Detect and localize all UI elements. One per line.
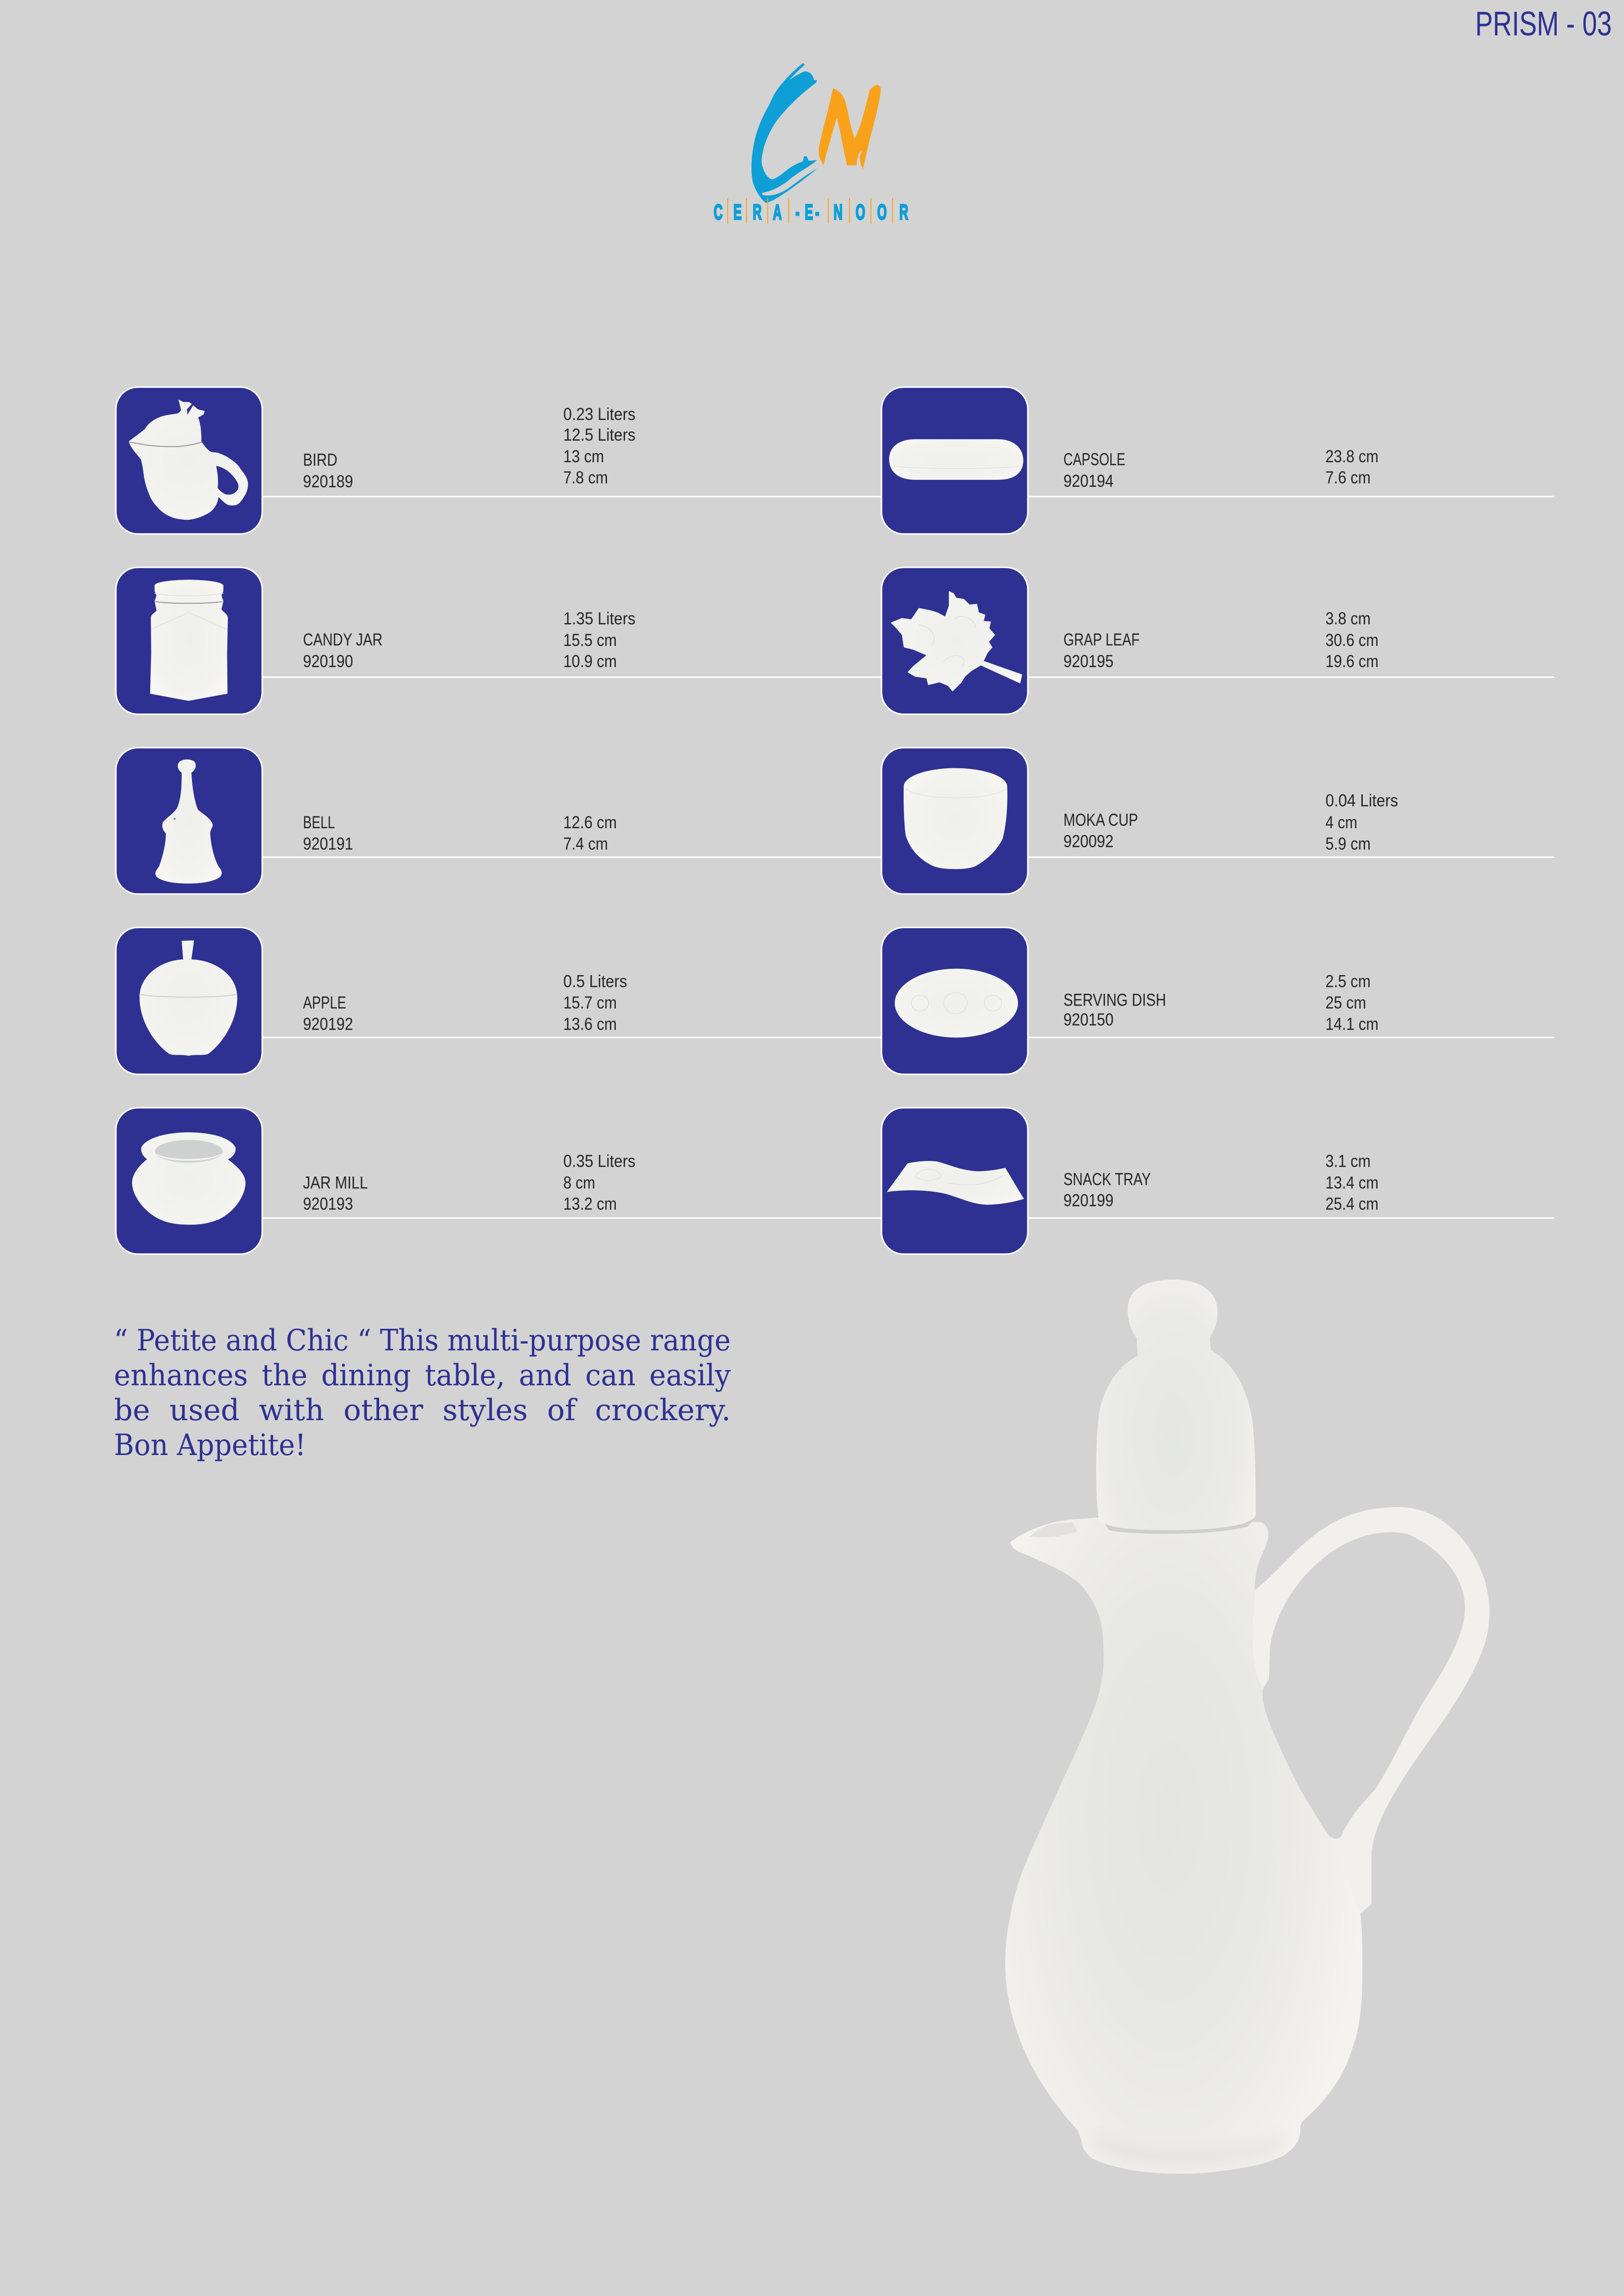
product name and code <box>1064 811 1138 851</box>
dimensions <box>1325 1151 1378 1213</box>
dimensions: 13 cm <box>563 447 604 466</box>
dimensions: 0.5 Liters <box>563 972 627 991</box>
dimensions: 7.8 cm <box>563 468 608 487</box>
dimensions: 3.1 cm <box>1325 1151 1371 1171</box>
product name and code <box>303 993 353 1034</box>
hero image: oil jug with stopper <box>1005 1280 1489 2174</box>
product: Serving Dish <box>881 927 1378 1074</box>
product: Bird <box>116 387 635 534</box>
dimensions: 19.6 cm <box>1325 652 1378 671</box>
description text: “ Petite and Chic “ This multi-purpose range <box>114 1323 731 1358</box>
product name and code: MOKA CUP <box>1064 811 1138 830</box>
dimensions: 13.6 cm <box>563 1015 617 1034</box>
dimensions: 0.23 Liters <box>563 405 635 424</box>
product name and code: 920190 <box>303 652 353 671</box>
product name and code <box>1064 990 1166 1030</box>
tile <box>881 927 1028 1074</box>
tile <box>881 748 1028 894</box>
product name and code: 920192 <box>303 1015 353 1034</box>
icon: grape leaf dish <box>891 591 1022 691</box>
dimensions: 5.9 cm <box>1325 834 1371 854</box>
product name and code: 920195 <box>1064 652 1114 671</box>
product name and code: CAPSOLE <box>1064 450 1126 469</box>
product: Jar Mill <box>116 1108 635 1254</box>
dimensions: 12.6 cm <box>563 813 617 832</box>
product name and code <box>1064 1170 1151 1210</box>
icon: moka cup <box>904 768 1007 869</box>
dimensions: 1.35 Liters <box>563 609 635 628</box>
icon: jar mill <box>132 1132 246 1225</box>
logo divider bars <box>727 198 893 224</box>
product name and code: BIRD <box>303 450 337 470</box>
product name and code: 920194 <box>1064 472 1114 491</box>
product name and code <box>303 1173 368 1213</box>
tile <box>116 567 262 714</box>
product: Grap Leaf <box>881 567 1378 714</box>
dimensions <box>563 972 627 1034</box>
product name and code <box>1064 630 1139 671</box>
product name and code: SNACK TRAY <box>1064 1170 1151 1189</box>
icon: apple jar <box>139 940 237 1056</box>
dimensions: 0.04 Liters <box>1325 791 1398 811</box>
product name and code: BELL <box>303 813 335 832</box>
dimensions <box>1325 447 1378 487</box>
icon: bell <box>155 759 221 884</box>
dimensions: 14.1 cm <box>1325 1015 1378 1034</box>
logo: Cera-e-Noor <box>714 63 908 224</box>
product: Candy Jar <box>116 567 635 714</box>
dimensions <box>563 813 617 854</box>
product name and code: 920150 <box>1064 1010 1114 1030</box>
dimensions <box>1325 972 1378 1034</box>
dimensions: 25 cm <box>1325 993 1366 1012</box>
product name and code: 920191 <box>303 834 353 854</box>
product name and code <box>303 450 353 491</box>
product name and code: JAR MILL <box>303 1173 368 1193</box>
dimensions <box>1325 609 1378 671</box>
dimensions: 2.5 cm <box>1325 972 1371 991</box>
icon: bird jug <box>129 399 248 520</box>
product name and code: 920092 <box>1064 832 1114 851</box>
logo mark: N <box>819 85 881 169</box>
dimensions: 13.4 cm <box>1325 1173 1378 1193</box>
icon: serving dish <box>895 969 1018 1037</box>
dimensions <box>1325 791 1398 854</box>
dimensions: 25.4 cm <box>1325 1195 1378 1213</box>
dimensions <box>563 405 635 487</box>
jug handle <box>1250 1507 1489 1916</box>
dimensions: 23.8 cm <box>1325 447 1378 466</box>
dimensions: 4 cm <box>1325 813 1357 832</box>
dimensions: 15.5 cm <box>563 631 617 650</box>
dimensions: 7.6 cm <box>1325 468 1371 487</box>
tile <box>116 1108 262 1254</box>
icon: candy jar <box>150 580 228 701</box>
product name and code: 920189 <box>303 472 353 491</box>
product: Capsole <box>881 387 1378 534</box>
dimensions <box>563 609 635 671</box>
product name and code: GRAP LEAF <box>1064 630 1139 649</box>
product name and code: 920193 <box>303 1195 353 1213</box>
tile <box>116 748 262 894</box>
dimensions: 7.4 cm <box>563 834 608 854</box>
description text: enhances the dining table, and can easily <box>114 1358 731 1393</box>
jug foot shading <box>1095 2132 1287 2165</box>
description text <box>114 1323 731 1462</box>
dimensions: 8 cm <box>563 1173 595 1193</box>
dimensions: 30.6 cm <box>1325 631 1378 650</box>
product: Moka Cup <box>881 748 1398 894</box>
icon: snack tray <box>887 1161 1024 1204</box>
product: Bell <box>116 748 617 894</box>
product name and code: 920199 <box>1064 1191 1114 1210</box>
dimensions: 13.2 cm <box>563 1195 617 1213</box>
product name and code <box>303 813 353 854</box>
product: Apple <box>116 927 627 1074</box>
product name and code <box>303 630 383 671</box>
logo wordmark: CERA-E-NOOR <box>714 200 908 224</box>
jug stopper <box>1096 1280 1256 1534</box>
dimensions: 12.5 Liters <box>563 425 635 445</box>
tile <box>116 927 262 1074</box>
dimensions: 15.7 cm <box>563 993 617 1012</box>
dimensions: 10.9 cm <box>563 652 617 671</box>
product name and code <box>1064 450 1126 491</box>
product name and code: CANDY JAR <box>303 630 383 649</box>
product name and code: APPLE <box>303 993 346 1012</box>
product: Snack Tray <box>881 1108 1378 1254</box>
tile <box>116 387 262 534</box>
dimensions: 3.8 cm <box>1325 609 1371 628</box>
tile <box>881 567 1028 714</box>
tile <box>881 387 1028 534</box>
dimensions: 0.35 Liters <box>563 1151 635 1171</box>
tile <box>881 1108 1028 1254</box>
description text: be used with other styles of crockery. <box>114 1393 731 1428</box>
jug body <box>1005 1517 1362 2174</box>
product name and code: SERVING DISH <box>1064 990 1166 1010</box>
description text: Bon Appetite! <box>114 1428 306 1462</box>
logo mark: C <box>751 63 817 203</box>
dimensions <box>563 1151 635 1213</box>
icon: capsule dish <box>889 439 1023 480</box>
pouring spout opening <box>1030 1522 1077 1538</box>
